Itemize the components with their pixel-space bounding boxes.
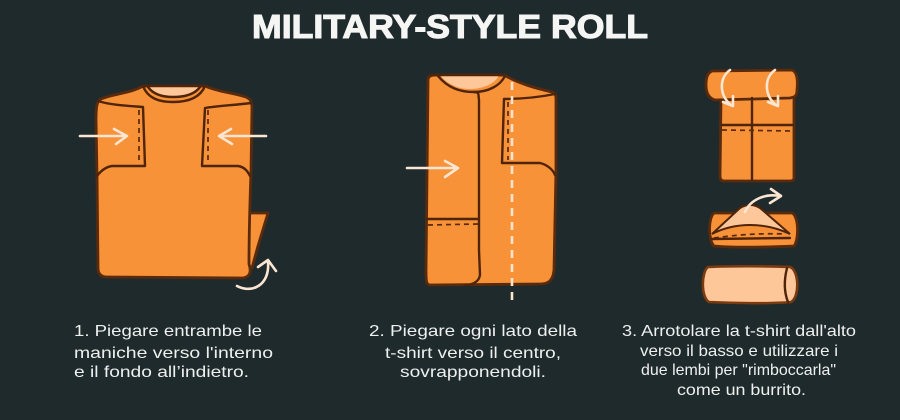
caption: step 2: t-shirt verso il centro,	[385, 345, 561, 362]
folded hem lines	[427, 218, 478, 220]
caption: step 3: due lembi per "rimboccarla"	[641, 362, 836, 379]
caption: step 2: 2. Piegare ogni lato della	[369, 323, 577, 340]
stage B: tucking hem	[710, 189, 798, 247]
title: MILITARY-STYLE ROLL	[252, 8, 648, 45]
right folded sleeve	[202, 103, 251, 176]
stage C: finished burrito	[703, 266, 797, 303]
arrow: side inward	[407, 161, 458, 177]
caption: step 1: e il fondo all’indietro.	[74, 364, 249, 381]
stage A: rolled from top	[706, 70, 797, 181]
caption: step 3: 3. Arrotolare la t-shirt dall'alto	[622, 323, 856, 340]
caption: step 1: 1. Piegare entrambe le	[74, 323, 262, 340]
shirt body	[96, 86, 252, 278]
collar	[148, 86, 200, 96]
shirt hem flap	[247, 213, 268, 268]
caption: step 1: maniche verso l'interno	[74, 345, 273, 362]
collar	[440, 75, 499, 89]
caption: step 3: come un burrito.	[677, 382, 806, 399]
left folded sleeve	[97, 101, 145, 176]
illustration: step 1 folded shirt	[80, 86, 276, 289]
arrow: hem backwards	[237, 260, 276, 289]
folded sleeve	[502, 94, 555, 175]
illustration: step 3 roll and tuck stages	[703, 70, 798, 303]
shirt body	[426, 75, 556, 285]
centre fold line	[511, 82, 513, 303]
caption: step 3: verso il basso e utilizzare i	[640, 343, 838, 360]
illustration: step 2 side folded shirt	[407, 75, 556, 303]
arrow: left sleeve inward	[80, 129, 127, 144]
arrow: right sleeve inward	[219, 129, 266, 144]
caption: step 2: sovrapponendoli.	[400, 364, 546, 381]
